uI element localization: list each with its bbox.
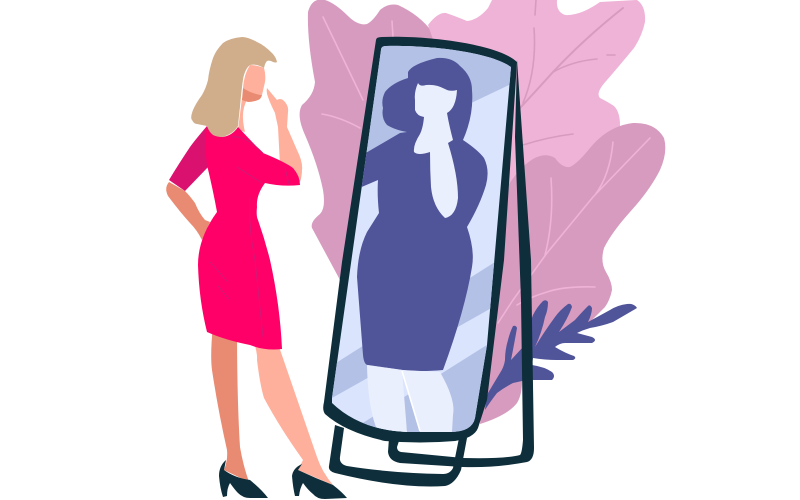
reflection: left leg bbox=[367, 365, 407, 432]
reflection bbox=[350, 58, 488, 432]
sleeve bbox=[169, 126, 210, 191]
dress bbox=[198, 126, 300, 350]
chin shadow bbox=[242, 88, 262, 102]
back arm bbox=[166, 182, 210, 240]
front leg bbox=[250, 330, 333, 485]
illustration: woman looking at her reflection in a mirror bbox=[166, 0, 666, 499]
leaf: back left bbox=[300, 0, 470, 420]
mirror frame bbox=[323, 37, 517, 442]
reflection: face and arm bbox=[414, 83, 458, 218]
mirror glass bbox=[332, 46, 511, 432]
woman bbox=[166, 37, 347, 499]
neck bbox=[238, 98, 247, 132]
mirror stand: front leg bbox=[329, 425, 467, 486]
dress creases bbox=[210, 137, 289, 337]
hair bbox=[191, 37, 277, 137]
leaf: back right light bbox=[428, 0, 645, 230]
leaf: front lower right bbox=[480, 123, 665, 424]
raised arm and hand bbox=[267, 88, 302, 182]
mirror bbox=[323, 37, 517, 442]
mirror stripes bbox=[325, 40, 515, 440]
back leg bbox=[211, 325, 249, 482]
left shoe bbox=[219, 460, 268, 498]
reflection: dress and hair bbox=[350, 58, 488, 371]
fern bbox=[485, 300, 637, 410]
reflection: right leg bbox=[402, 370, 453, 432]
face bbox=[243, 65, 265, 95]
right shoe bbox=[292, 464, 347, 499]
mirror stand: back leg bbox=[388, 60, 534, 467]
